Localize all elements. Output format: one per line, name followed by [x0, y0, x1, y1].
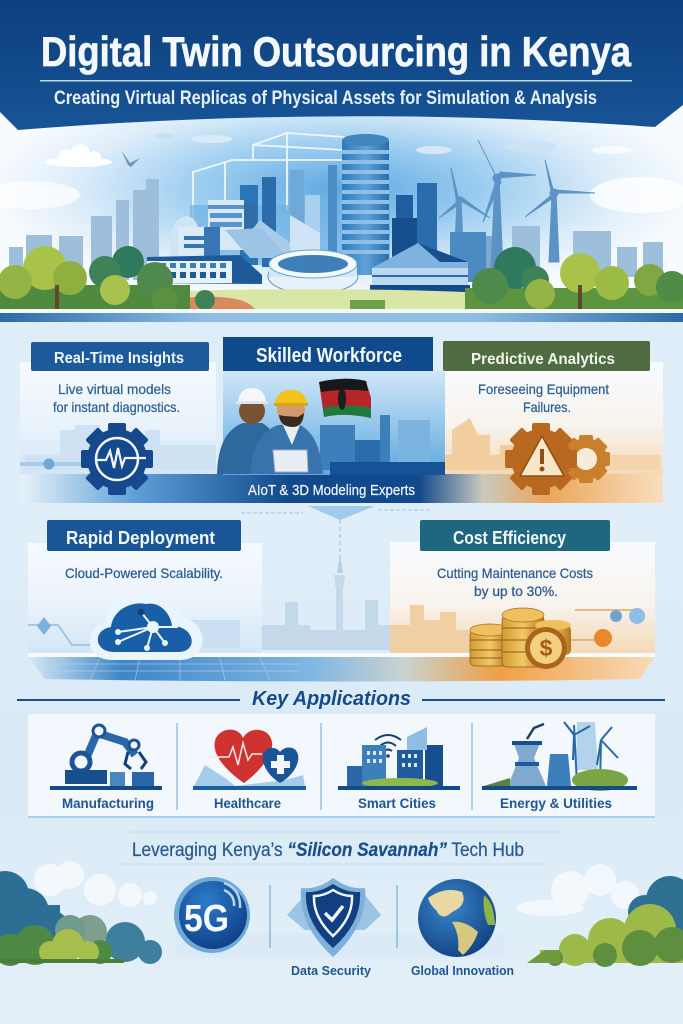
background skyline right [450, 226, 663, 277]
panel: predictive analytics: Predictive Analytics [471, 351, 615, 368]
dollar coin [525, 627, 567, 669]
icon: white clouds [0, 133, 683, 213]
icon: robot arm [50, 725, 162, 790]
faint factory skyline [25, 425, 216, 470]
connector arrow [241, 506, 432, 572]
icon: Kenyan flag [319, 379, 371, 418]
icon: globe [418, 879, 496, 957]
clouds and trees left [0, 861, 162, 966]
worker in white helmet [217, 388, 282, 474]
body text: Live virtual models [58, 381, 171, 397]
panel: cost efficiency: Cost Efficiency [453, 528, 566, 548]
mid buildings [170, 165, 486, 282]
subtitle: Creating Virtual Replicas of Physical Assets for Simulation & Analysis [54, 88, 597, 109]
heading: silicon savannah tech hub [120, 832, 560, 864]
band under top row [20, 474, 663, 503]
small gear [562, 435, 610, 483]
coin stack left [470, 624, 510, 666]
icon: gear with pulse [81, 423, 153, 495]
icon group: tech hub row [174, 877, 505, 958]
panel: skilled workforce [217, 337, 445, 499]
heading: silicon savannah tech hub: Leveraging Kenya’s “Silicon Savannah” Tech Hub [132, 840, 524, 861]
panel: real-time insights [20, 342, 216, 474]
icon: power plant and turbines [482, 722, 637, 791]
icon: security shield [287, 878, 381, 957]
panel: key applications [28, 714, 655, 817]
body text: Foreseeing Equipment [478, 381, 609, 397]
icon: bird [121, 150, 140, 167]
central glass tower [342, 134, 389, 275]
circuit line [28, 625, 90, 645]
heading [420, 520, 610, 551]
heading [443, 341, 650, 371]
body text: Cutting Maintenance Costs [437, 565, 593, 581]
low campus building [147, 255, 262, 284]
circuit line [570, 610, 640, 640]
application: energy and utilities [482, 722, 637, 811]
divider strip [0, 313, 683, 322]
caption: AIoT & 3D Modeling Experts [248, 482, 415, 499]
heading [47, 520, 241, 551]
icon: wind turbines [439, 140, 595, 270]
icon: coin stacks: $ [540, 635, 553, 661]
panel: predictive analytics: Failures. [523, 399, 571, 415]
panel: cost efficiency [390, 520, 655, 653]
background skyline left [9, 179, 159, 280]
wireframe digital twin outline [193, 133, 350, 240]
icon: cloud network [90, 594, 203, 660]
application: energy and utilities: Energy & Utilities [500, 795, 612, 811]
icon: coin stacks [470, 608, 571, 669]
stadium [268, 250, 358, 294]
application: smart cities: Smart Cities [358, 795, 436, 811]
panel: skilled workforce: Skilled Workforce [256, 345, 402, 367]
perspective band [28, 653, 655, 682]
heading [223, 337, 433, 371]
icon: city with wifi [338, 727, 460, 790]
application: manufacturing: Manufacturing [62, 795, 154, 811]
large gear [505, 423, 577, 495]
panel: rapid deployment: Rapid Deployment [66, 528, 215, 548]
panel: rapid deployment [28, 520, 262, 653]
icon: 5G badge [174, 877, 250, 953]
labels: tech hub row: Global Innovation [411, 963, 514, 978]
section heading: key applications: Key Applications [252, 688, 411, 710]
landscape ground and path [160, 289, 500, 310]
icon: 5G badge: 5G [184, 898, 229, 940]
coin stack back [502, 608, 544, 667]
panel: real-time insights: Real-Time Insights [54, 350, 184, 367]
faint orange skyline [445, 418, 515, 470]
header banner [0, 0, 683, 130]
center Nairobi skyline [262, 555, 460, 650]
workforce skyline [320, 415, 430, 470]
application: healthcare: Healthcare [214, 795, 281, 811]
orange skyline [390, 605, 480, 653]
application: healthcare [193, 730, 306, 811]
application: smart cities [338, 727, 460, 811]
panel: real-time insights: for instant diagnostics. [53, 399, 180, 415]
icon: heart and cross [193, 730, 306, 790]
body text: Cloud-Powered Scalability. [65, 565, 223, 581]
hero illustration: city skyline [0, 100, 683, 313]
trees left [0, 246, 215, 313]
panel: predictive analytics [443, 341, 663, 474]
glass pavilion building [370, 243, 470, 298]
labels: tech hub row [291, 963, 514, 978]
worker in yellow helmet [250, 390, 323, 474]
clouds and trees right [516, 864, 683, 967]
panel: cost efficiency: by up to 30%. [474, 583, 558, 599]
heading [31, 342, 209, 371]
application: manufacturing [50, 725, 162, 811]
labels: tech hub row: Data Security [291, 963, 372, 978]
icon: warning gear [505, 423, 610, 495]
trees right [350, 247, 683, 310]
